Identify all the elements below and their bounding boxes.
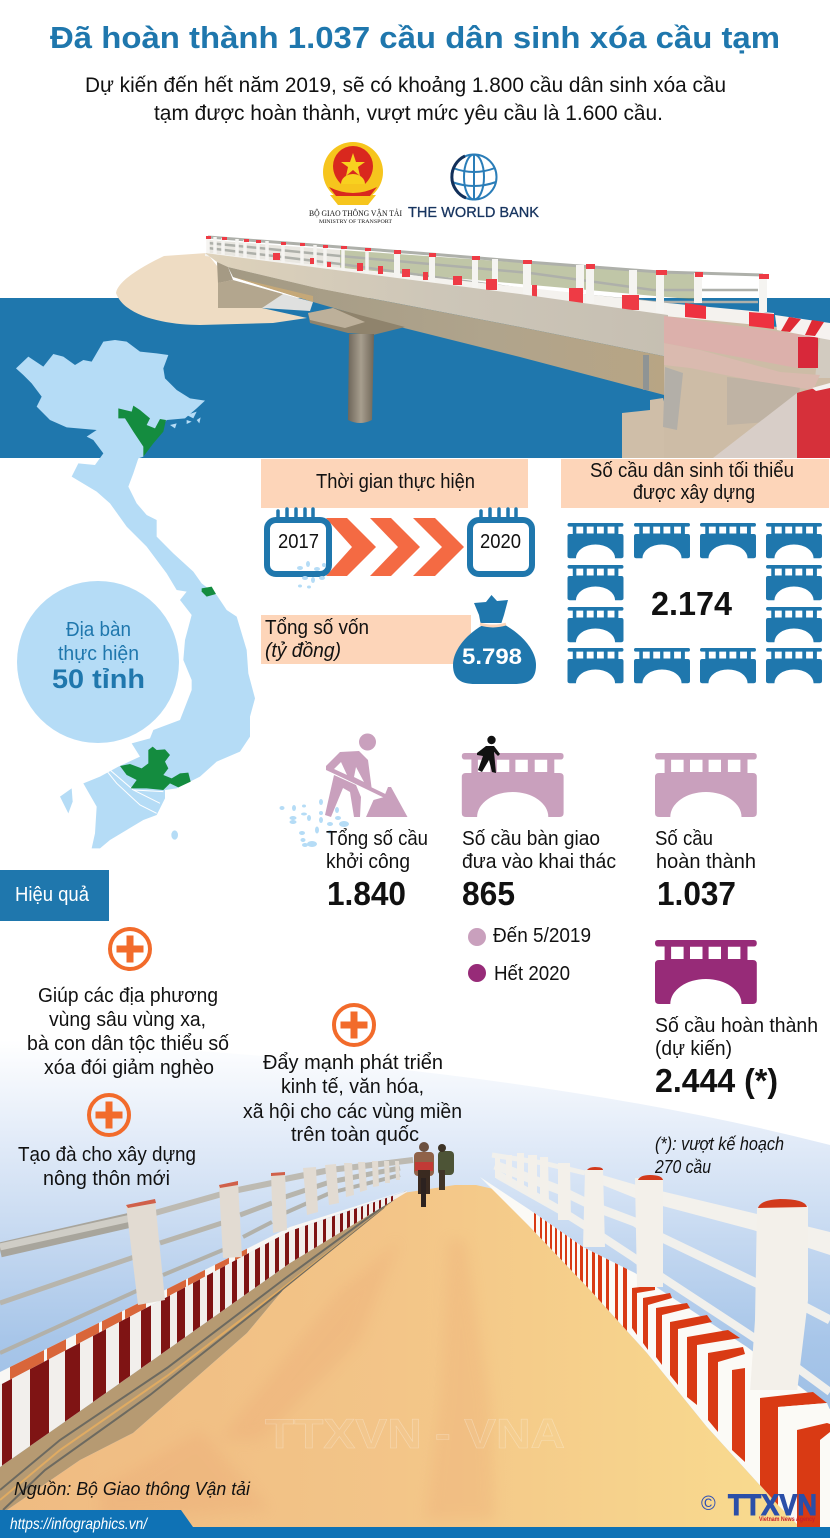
map of Vietnam (16, 340, 255, 848)
right barrier large stripes (632, 1285, 745, 1462)
icon: money bag: 5.798 (462, 644, 522, 669)
logo: Ministry of Transport emblem: MINISTRY OF TRANSPORT (319, 219, 393, 225)
stat: bridges handed over: đưa vào khai thác (462, 851, 616, 873)
stat: bridges handed over: Số cầu bàn giao (462, 828, 600, 850)
panel: total capital: (tỷ đồng) (265, 640, 341, 662)
heading: được xây dựng (633, 482, 755, 504)
heading: Thời gian thực hiện (316, 471, 475, 493)
calendar 2017: 2017 (278, 531, 319, 553)
greenery behind railing (340, 250, 700, 300)
stat: bridges completed (655, 753, 757, 912)
right posts (495, 1153, 808, 1392)
beam underside strip (233, 277, 313, 302)
intro text: Dự kiến đến hết năm 2019, sẽ có khoảng 1.800 cầu dân sinh xóa cầu (85, 73, 726, 97)
number: 2.174 (651, 585, 733, 622)
right rails (492, 1155, 830, 1392)
right barrier front blocks (745, 1390, 830, 1527)
northern provinces (118, 406, 166, 457)
source: Nguồn: Bộ Giao thông Vận tải (14, 1479, 251, 1499)
red end block (797, 386, 830, 458)
railing posts (208, 237, 763, 313)
logo: TTXVN: TTXVN (728, 1489, 817, 1522)
intro text (85, 73, 726, 125)
effect 3: xã hội cho các vùng miền (243, 1101, 462, 1123)
abutment block (218, 280, 283, 308)
panel: total capital: Tổng số vốn (265, 617, 369, 639)
left barrier top face (0, 1180, 410, 1390)
pier column (348, 334, 374, 423)
icon: purple bridge (655, 940, 757, 1004)
circle: implementation area: 50 tỉnh (52, 664, 145, 694)
legend: Đến 5/2019 (493, 925, 591, 947)
watermark: TTXVN - VNA (265, 1410, 565, 1457)
calendar 2017 (267, 509, 329, 574)
intro text: tạm được hoàn thành, vượt mức yêu cầu là 1.600 cầu. (154, 101, 663, 125)
photo: rural bridge (0, 1142, 830, 1538)
arrows (326, 518, 464, 576)
red curb blocks (685, 303, 706, 319)
diagonal rubble (713, 393, 797, 458)
shoulder lines (0, 1198, 395, 1510)
right lower block (622, 398, 680, 458)
circle: implementation area (17, 581, 179, 743)
circle: implementation area: thực hiện (58, 643, 139, 665)
calendar 2020: 2020 (480, 531, 521, 553)
effect 2: Tạo đà cho xây dựng (18, 1144, 196, 1166)
left posts (126, 1161, 400, 1305)
stat: bridges completed: 1.037 (657, 875, 736, 912)
gray strut (643, 355, 649, 390)
footnote: (*): vượt kế hoạch (655, 1134, 784, 1154)
effect 1: xóa đói giảm nghèo (44, 1057, 214, 1079)
railing red caps and blocks (206, 236, 769, 310)
footer bar (0, 1510, 830, 1538)
splash (297, 561, 326, 588)
beam under deck (228, 267, 668, 396)
stat: bridges handed over: 865 (462, 875, 515, 912)
right top rail (585, 1170, 830, 1255)
stained wall (664, 316, 818, 368)
stat: bridges started: 1.840 (327, 875, 406, 912)
logo: TTXVN: Vietnam News Agency (759, 1517, 816, 1523)
icon: plus (89, 1095, 129, 1135)
effect 1 (27, 929, 229, 1079)
panel: total capital (261, 595, 536, 684)
icon: plus (334, 1005, 374, 1045)
railing backdrop (208, 240, 340, 268)
icon: bridge (655, 753, 757, 817)
legend: Hết 2020 (494, 963, 570, 985)
effect 3: kinh tế, văn hóa, (281, 1076, 424, 1098)
gray wall under span (262, 294, 313, 311)
logo: The World Bank (408, 154, 539, 221)
stat: bridges handed over (462, 736, 616, 912)
stat: bridges completed: hoàn thành (656, 851, 756, 873)
stat: bridges started: khởi công (326, 851, 410, 873)
left post caps (126, 1172, 285, 1208)
pier cap (308, 308, 405, 335)
motorbike riders (414, 1142, 454, 1207)
stat: bridges started (280, 734, 428, 912)
left barrier front (0, 1180, 410, 1480)
stat: planned completed bridges (655, 940, 818, 1099)
right barrier stripes (775, 315, 830, 340)
stat: planned completed bridges: Số cầu hoàn thành (655, 1015, 818, 1037)
heading: Số cầu dân sinh tối thiểu (590, 460, 794, 482)
logo: The World Bank: THE WORLD BANK (408, 204, 539, 221)
splash (280, 799, 349, 847)
southern provinces (120, 747, 191, 790)
legend (468, 925, 591, 985)
embankment (116, 253, 307, 325)
effect 1: bà con dân tộc thiểu số (27, 1033, 229, 1055)
white curb (205, 253, 774, 329)
central province (202, 587, 216, 597)
footnote (654, 1134, 784, 1177)
panel: effects heading (0, 870, 109, 921)
Mekong channels (103, 767, 163, 813)
heading (261, 459, 528, 508)
stat: bridges started: Tổng số cầu (326, 828, 428, 850)
rails (208, 237, 763, 302)
shoulder (0, 1190, 407, 1527)
stat: planned completed bridges: 2.444 (*) (655, 1062, 778, 1099)
right abutment (664, 316, 830, 458)
road surface (0, 1185, 800, 1527)
logo: Ministry of Transport emblem (309, 142, 402, 225)
logo: Ministry of Transport emblem: BỘ GIAO THÔNG VẬN TẢI (309, 208, 402, 218)
right barrier (480, 1178, 830, 1495)
right post caps (587, 1167, 807, 1208)
effect 3 (243, 1005, 462, 1146)
blue band (0, 298, 830, 458)
stat: planned completed bridges: (dự kiến) (655, 1038, 732, 1060)
title: Đã hoàn thành 1.037 cầu dân sinh xóa cầu tạm (50, 20, 780, 55)
circle: implementation area: Địa bàn (66, 619, 131, 641)
effect 1: vùng sâu vùng xa, (49, 1009, 206, 1031)
icon: money bag (453, 595, 536, 684)
effect 3: Đẩy mạnh phát triển (263, 1052, 443, 1074)
icon: worker digging (325, 734, 408, 817)
red block (798, 337, 818, 368)
lower sky background (0, 1040, 830, 1538)
photo: concrete bridge (116, 236, 830, 458)
icon: bridge with pedestrian (462, 736, 564, 817)
left rails (0, 1160, 413, 1353)
heading (561, 459, 829, 508)
stat: bridges completed: Số cầu (655, 828, 713, 850)
footer bar: https://infographics.vn/ (10, 1516, 148, 1533)
panel: minimum bridges (561, 459, 829, 683)
road patches (100, 1240, 495, 1520)
panel: implementation time (261, 459, 532, 588)
effect 2: nông thôn mới (43, 1168, 170, 1190)
icon: plus (110, 929, 150, 969)
effect 1: Giúp các địa phương (38, 985, 218, 1007)
mainland (16, 340, 255, 848)
calendar 2020 (470, 509, 532, 574)
footnote: 270 cầu (654, 1157, 711, 1177)
logo: TTXVN (701, 1489, 817, 1523)
effect 2 (18, 1095, 196, 1190)
effect 3: trên toàn quốc (291, 1124, 419, 1146)
panel: effects heading: Hiệu quả (15, 884, 90, 906)
islands (60, 412, 201, 840)
bridge icon grid (568, 523, 822, 683)
logo: TTXVN: © (701, 1493, 716, 1515)
deck side (205, 253, 668, 357)
